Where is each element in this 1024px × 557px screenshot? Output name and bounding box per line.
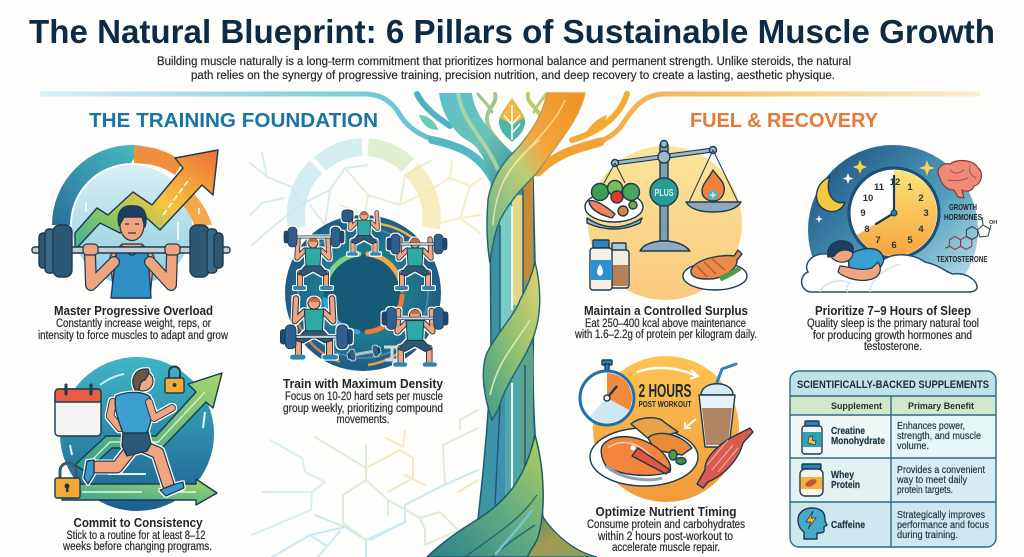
column header: supplement: Supplement bbox=[831, 401, 883, 412]
intro text: Building muscle naturally is a long-term commitment that prioritizes hormonal balance and permanent strength. Unlike steroids, the natural bbox=[157, 56, 851, 68]
benefit: strength, and muscle bbox=[897, 431, 981, 442]
heading: Master Progressive Overload bbox=[54, 303, 213, 318]
lifter top right bbox=[387, 234, 447, 288]
clock: 3 bbox=[923, 208, 929, 219]
name: Protein bbox=[831, 480, 860, 491]
body text bbox=[587, 519, 745, 554]
body text bbox=[62, 530, 212, 553]
stars bbox=[853, 160, 935, 176]
icon: small leaf right bbox=[586, 115, 607, 133]
moon bbox=[816, 177, 845, 212]
clock: 11 bbox=[874, 182, 885, 193]
body text: testosterone. bbox=[864, 341, 922, 353]
body text: intensity to force muscles to adapt and grow bbox=[38, 330, 229, 342]
bench bbox=[384, 347, 427, 360]
lock bottom bbox=[55, 463, 80, 498]
benefit bbox=[897, 421, 981, 452]
stopwatch bbox=[580, 360, 634, 425]
icon: creatine jar bbox=[802, 421, 822, 454]
table grid bbox=[790, 371, 996, 547]
body text: Quality sleep is the primary natural tool bbox=[807, 318, 979, 330]
chicken plate bbox=[683, 250, 747, 290]
trunk bbox=[440, 170, 560, 557]
column header: benefit: Primary Benefit bbox=[908, 401, 975, 412]
band streaks bbox=[493, 100, 565, 225]
left main limb bbox=[439, 93, 514, 205]
table header band bbox=[790, 396, 996, 415]
middle band streak bbox=[490, 320, 530, 395]
benefit: during training. bbox=[897, 530, 958, 541]
benefit: protein targets. bbox=[897, 485, 953, 496]
shake cup bbox=[699, 364, 736, 447]
label: hydroxyl: OH bbox=[989, 220, 997, 226]
intro text: path relies on the synergy of progressive training, precision nutrition, and deep recovery to create a lasting, aesthetic physique. bbox=[191, 70, 835, 82]
lifter arms bbox=[83, 244, 180, 285]
heading: Optimize Nutrient Timing bbox=[596, 504, 737, 519]
heading: fuel: FUEL & RECOVERY bbox=[690, 110, 879, 132]
body text: Eat 250–400 kcal above maintenance bbox=[585, 318, 746, 330]
body text bbox=[574, 318, 757, 341]
bottles bbox=[590, 240, 629, 290]
name: Caffeine bbox=[831, 520, 865, 531]
body text bbox=[283, 391, 443, 426]
icon: small leaf left bbox=[419, 115, 438, 130]
benefit: Enhances power, bbox=[897, 421, 965, 432]
lock top bbox=[165, 367, 184, 393]
body text: accelerate muscle repair. bbox=[612, 542, 720, 554]
lower band highlight bbox=[495, 510, 532, 555]
flat arrow highlight bbox=[82, 491, 196, 493]
icon: runner with calendar and locks bbox=[55, 357, 222, 511]
benefit: performance and focus bbox=[897, 520, 989, 531]
tree crown branches bbox=[417, 94, 627, 178]
clock bbox=[849, 168, 939, 258]
heading: Maintain a Controlled Surplus bbox=[584, 303, 748, 318]
icon: timing composition bbox=[580, 356, 753, 502]
lifter top left bbox=[284, 227, 344, 288]
table background bbox=[790, 371, 996, 547]
benefit bbox=[896, 465, 985, 496]
flame pan bbox=[686, 170, 741, 212]
body text: movements. bbox=[336, 414, 390, 426]
flat arrow bbox=[62, 479, 217, 505]
body text: Stick to a routine for at least 8–12 bbox=[66, 530, 206, 542]
twisting band middle bbox=[483, 262, 540, 420]
row: creatine bbox=[802, 421, 981, 454]
small stars bbox=[815, 173, 854, 223]
name: Creatine bbox=[831, 426, 865, 437]
name: Monohydrate bbox=[831, 436, 885, 447]
background hexagon network bottom bbox=[252, 410, 478, 557]
panel: maximum density bbox=[280, 147, 448, 426]
clock: 1 bbox=[907, 182, 913, 193]
body text bbox=[807, 318, 979, 353]
dumbbell bbox=[347, 345, 381, 361]
table title band bbox=[790, 371, 996, 396]
header band right bbox=[570, 94, 980, 150]
tree bbox=[417, 93, 627, 557]
body text: Focus on 10-20 hard sets per muscle bbox=[285, 391, 443, 403]
clock: 4 bbox=[918, 224, 924, 235]
clock: 12 bbox=[890, 177, 900, 188]
label: growth hormones: HORMONES bbox=[944, 212, 982, 222]
label: 2 hours: 2 HOURS bbox=[638, 381, 692, 401]
name bbox=[831, 426, 885, 447]
panel: consistency bbox=[55, 357, 222, 553]
panel: controlled surplus bbox=[574, 140, 757, 341]
brain bbox=[938, 161, 981, 198]
clock: 10 bbox=[863, 193, 873, 204]
name: Whey bbox=[831, 470, 854, 481]
label: growth hormones: GROWTH bbox=[949, 202, 977, 212]
molecule bbox=[945, 217, 991, 250]
table title: SCIENTIFICALLY-BACKED SUPPLEMENTS bbox=[797, 379, 989, 391]
sleeper bbox=[827, 239, 883, 280]
panel: sleep bbox=[802, 145, 997, 353]
lifter bottom left bbox=[280, 297, 352, 357]
intro text bbox=[157, 56, 851, 82]
clock: 9 bbox=[860, 208, 866, 219]
icon: whey jar bbox=[800, 464, 823, 496]
body text: for producing growth hormones and bbox=[813, 330, 972, 342]
panel: progressive overload bbox=[32, 145, 230, 342]
icon: tree leaf bbox=[499, 98, 525, 142]
icon: density circle with lifters bbox=[280, 210, 448, 371]
lifter body bbox=[110, 206, 154, 298]
barbell bbox=[32, 225, 230, 277]
benefit: Strategically improves bbox=[897, 510, 985, 521]
plus badge bbox=[650, 178, 678, 206]
icon: head with bolt bbox=[798, 508, 827, 539]
benefit: volume. bbox=[897, 441, 929, 452]
icon: lifter with rising arrow bbox=[32, 145, 230, 298]
label: testosterone: TEXTOSTERONE bbox=[936, 254, 988, 264]
clock: 2 bbox=[918, 193, 924, 204]
salad plate bbox=[585, 180, 643, 229]
label: post workout: POST WORKOUT bbox=[638, 400, 692, 409]
benefit: way to meet daily bbox=[896, 475, 967, 486]
row: caffeine bbox=[798, 508, 989, 541]
panel: supplements table bbox=[790, 371, 996, 547]
body text: Constantly increase weight, reps, or bbox=[56, 318, 211, 330]
arrow highlight bbox=[90, 392, 205, 462]
body text: within 2 hours post-workout to bbox=[597, 531, 733, 543]
runner bbox=[84, 369, 184, 496]
left limb streak bbox=[458, 93, 498, 170]
lifter bench right bbox=[382, 307, 448, 365]
benefit bbox=[897, 510, 989, 541]
clock: 8 bbox=[864, 224, 870, 235]
lifter top bbox=[342, 210, 379, 254]
heading: Commit to Consistency bbox=[74, 515, 203, 530]
plate of salmon bbox=[590, 418, 698, 486]
clock: 5 bbox=[907, 235, 913, 246]
clock: 7 bbox=[875, 235, 881, 246]
label: growth hormones bbox=[944, 202, 982, 222]
header band left bbox=[40, 94, 450, 143]
cloud bed bbox=[802, 254, 977, 292]
title: The Natural Blueprint: 6 Pillars of Sustainable Muscle Growth bbox=[29, 13, 995, 50]
clock: 6 bbox=[891, 240, 897, 251]
benefit: Provides a convenient bbox=[897, 465, 985, 476]
icon: pale segmented ring bbox=[296, 147, 432, 228]
trunk root right bbox=[525, 515, 597, 557]
scale stand bbox=[660, 145, 668, 241]
body text: Consume protein and carbohydrates bbox=[587, 519, 745, 531]
row shading bbox=[790, 415, 996, 547]
icon: balance scale bbox=[585, 140, 747, 300]
body text: weeks before changing programs. bbox=[62, 541, 212, 553]
twisting band upper with right limb bbox=[487, 93, 585, 263]
lower band streaks bbox=[465, 495, 537, 557]
heading: Train with Maximum Density bbox=[283, 376, 444, 391]
heading: Prioritize 7–9 Hours of Sleep bbox=[815, 303, 971, 318]
body text: with 1.6–2.2g of protein per kilogram daily. bbox=[574, 329, 757, 341]
panel: nutrient timing bbox=[580, 356, 753, 554]
plus badge: PLUS bbox=[654, 188, 674, 199]
rising arrow bbox=[75, 373, 222, 472]
muscle bbox=[697, 428, 753, 488]
calendar bbox=[55, 385, 101, 436]
heading: training: THE TRAINING FOUNDATION bbox=[89, 110, 378, 132]
body text: group weekly, prioritizing compound bbox=[283, 403, 443, 415]
twisting band lower bbox=[427, 435, 543, 557]
row: whey bbox=[800, 464, 985, 496]
name bbox=[831, 470, 860, 491]
icon: night sky with clock and sleeper bbox=[800, 145, 997, 293]
background hexagon network top bbox=[250, 153, 482, 245]
body text bbox=[38, 318, 229, 342]
